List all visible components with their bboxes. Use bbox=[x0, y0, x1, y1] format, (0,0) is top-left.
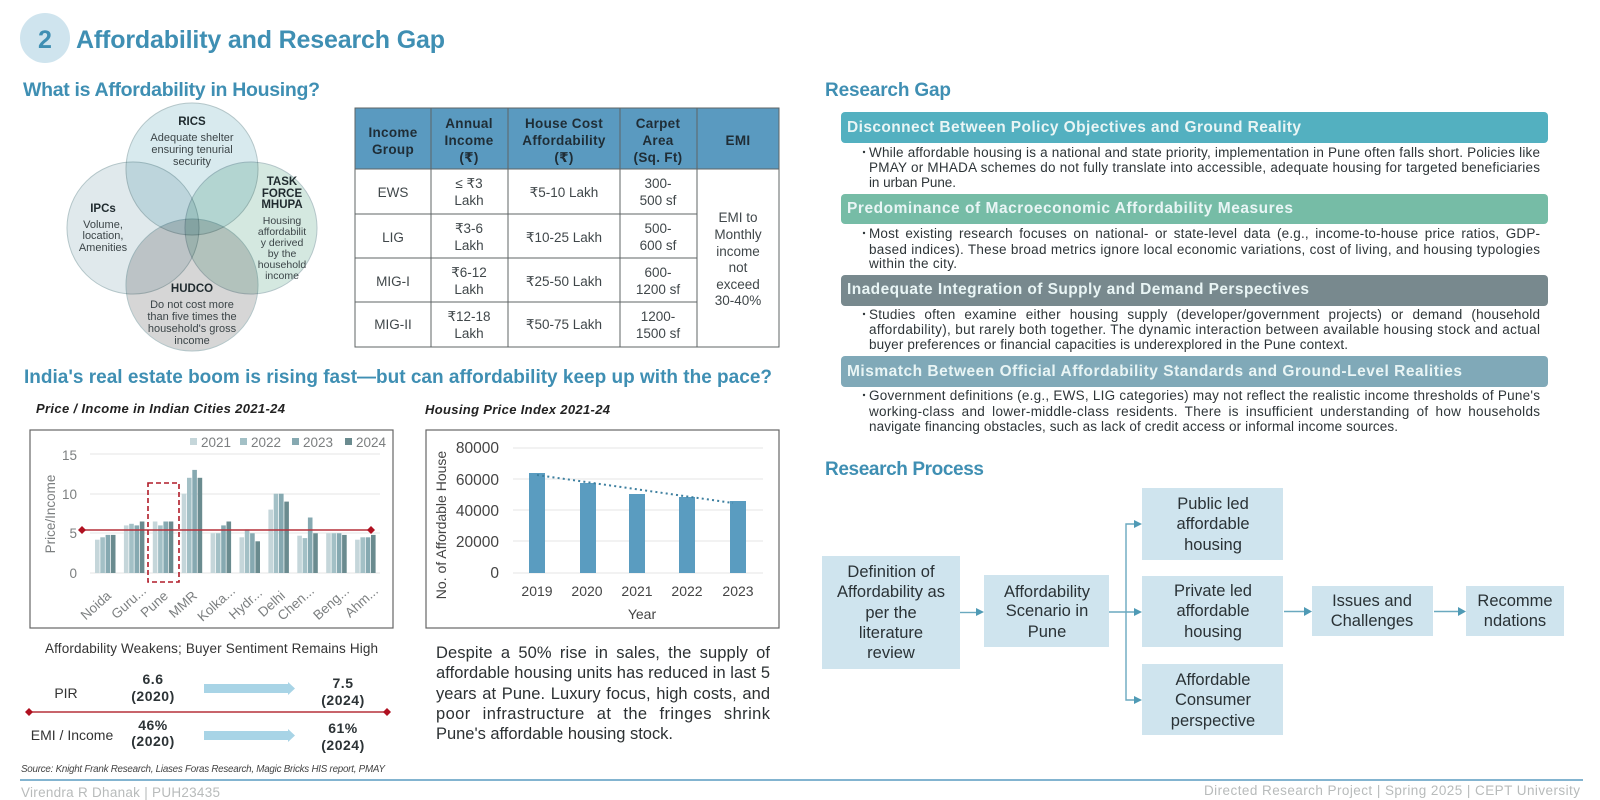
paragraph: supply reduced: years at Pune. Luxury focus, high costs, and bbox=[436, 685, 770, 703]
item: macroeconomic measures: Most existing research focuses on national- or state-level data (e.g., income-to-house price ratios, GDP- bbox=[869, 226, 1540, 241]
venn diagram: affordability definitions: than five times the bbox=[147, 311, 237, 323]
table: income groups: LIG bbox=[382, 230, 404, 245]
axis labels bbox=[433, 440, 754, 622]
step: recommendations: ndations bbox=[1484, 612, 1546, 630]
heading: what is affordability: What is Affordability in Housing? bbox=[23, 79, 320, 101]
footer: Virendra R Dhanak | PUH23435 bbox=[21, 785, 220, 800]
table: income groups: Income bbox=[368, 125, 418, 140]
category labels: Guru... bbox=[108, 583, 149, 622]
table: income groups: ₹25-50 Lakh bbox=[526, 274, 602, 289]
table: income groups: not bbox=[729, 260, 748, 275]
bar chart: affordable house supply bbox=[426, 430, 779, 628]
venn diagram: affordability definitions: ensuring tenurial bbox=[151, 144, 233, 156]
table: income groups: ₹5-10 Lakh bbox=[530, 185, 598, 200]
title: Affordability and Research Gap bbox=[76, 26, 445, 54]
chart title: housing index: Housing Price Index 2021-24 bbox=[425, 402, 611, 417]
item: policy disconnect: PMAY or MHADA schemes do not fully translate into accessible, adequate housing for targeted beneficiaries bbox=[869, 160, 1540, 175]
footer: Directed Research Project | Spring 2025 | CEPT University bbox=[1204, 783, 1580, 798]
step: definition: Definition of bbox=[847, 563, 935, 581]
category labels: Pune bbox=[138, 588, 171, 620]
item: macroeconomic measures bbox=[841, 194, 1548, 271]
paragraph: supply reduced bbox=[436, 644, 771, 743]
table: income groups: (₹) bbox=[554, 150, 574, 165]
threshold line bbox=[78, 526, 375, 534]
axis labels: No. of Affordable House bbox=[433, 451, 449, 599]
arrows: branching bbox=[1109, 520, 1142, 704]
table: income groups: EMI to bbox=[718, 210, 758, 225]
venn diagram: affordability definitions: income bbox=[265, 270, 299, 282]
table: income groups: ≤ ₹3 bbox=[455, 176, 483, 191]
step: scenario: Pune bbox=[1028, 623, 1066, 641]
axis labels: 20000 bbox=[456, 534, 499, 551]
step: consumer bbox=[1142, 664, 1283, 735]
step: private led: Private led bbox=[1174, 582, 1252, 600]
title: 2 bbox=[38, 26, 52, 54]
venn diagram: affordability definitions: Do not cost more bbox=[150, 299, 234, 311]
step: definition: review bbox=[867, 644, 915, 662]
table: income groups: 600 sf bbox=[640, 238, 677, 253]
venn diagram: affordability definitions: security bbox=[173, 156, 211, 168]
step: scenario: Affordability bbox=[1004, 583, 1091, 601]
paragraph: supply reduced: Pune's affordable housing stock. bbox=[436, 725, 673, 743]
axis labels: Year bbox=[628, 606, 656, 622]
table: income groups: Lakh bbox=[454, 193, 484, 208]
table: income groups: ₹6-12 bbox=[451, 265, 487, 280]
highlight: Pune bbox=[148, 483, 179, 582]
step: public led: Public led bbox=[1177, 495, 1249, 513]
legend: 2022 bbox=[251, 435, 281, 450]
trend line bbox=[537, 475, 733, 503]
table: income groups: (Sq. Ft) bbox=[634, 150, 682, 165]
step: private led bbox=[1142, 576, 1283, 647]
step: recommendations: Recomme bbox=[1477, 592, 1553, 610]
venn diagram: affordability definitions: household's gross bbox=[148, 323, 237, 335]
step: definition: per the bbox=[865, 604, 917, 622]
table: income groups: (₹) bbox=[459, 150, 479, 165]
category labels bbox=[78, 583, 381, 624]
venn diagram: affordability definitions: IPCs bbox=[90, 203, 116, 215]
item: official standards mismatch bbox=[841, 356, 1548, 434]
table: income groups: Income bbox=[444, 133, 494, 148]
table: income groups: Annual bbox=[445, 116, 493, 131]
panel: research gap list bbox=[841, 112, 1548, 434]
paragraph: supply reduced: Despite a 50% rise in sales, the supply of bbox=[436, 644, 770, 662]
table: income groups: ₹12-18 bbox=[447, 309, 491, 324]
axis labels: 80000 bbox=[456, 440, 499, 457]
step: scenario: Scenario in bbox=[1006, 602, 1088, 620]
table: income groups: ₹3-6 bbox=[455, 221, 483, 236]
legend: 2023 bbox=[303, 435, 333, 450]
sub-heading: affordability weakens: Affordability Weakens; Buyer Sentiment Remains High bbox=[45, 641, 378, 656]
table: income groups: Carpet bbox=[636, 116, 680, 131]
heading: research process: Research Process bbox=[825, 459, 984, 480]
item: supply and demand: affordability), but rarely both together. The dynamic interaction between available housing stock and actual bbox=[869, 322, 1540, 337]
item: official standards mismatch: Mismatch Between Official Affordability Standards and Ground-Level Realities bbox=[847, 363, 1462, 380]
venn diagram: affordability definitions: affordabilit bbox=[258, 226, 306, 238]
table: income groups: 300- bbox=[644, 176, 672, 191]
table: income groups: Lakh bbox=[454, 238, 484, 253]
category labels: Noida bbox=[78, 588, 114, 623]
category labels: Ahm... bbox=[342, 583, 381, 620]
table: income groups: 1500 sf bbox=[636, 326, 680, 341]
step: private led: affordable bbox=[1176, 602, 1250, 620]
chart title: price to income: Price / Income in Indian Cities 2021-24 bbox=[36, 401, 286, 416]
item: supply and demand: Studies often examine either housing supply (developer/government projects) or demand (household bbox=[869, 307, 1540, 322]
bar chart: price to income by city bbox=[30, 430, 393, 628]
source note: Source: Knight Frank Research, Liases Foras Research, Magic Bricks HIS report, PMAY bbox=[21, 764, 386, 775]
table: income groups: Lakh bbox=[454, 326, 484, 341]
table: income groups: EWS bbox=[378, 185, 408, 200]
venn diagram: affordability definitions: FORCE bbox=[262, 188, 302, 200]
y axis labels: 0 bbox=[69, 566, 77, 581]
paragraph: supply reduced: affordable housing units has reduced in last 5 bbox=[436, 664, 770, 682]
venn diagram: affordability definitions: by the bbox=[268, 248, 296, 260]
comparison: PIR and EMI: EMI / Income bbox=[31, 727, 113, 743]
comparison: PIR and EMI: (2024) bbox=[321, 692, 365, 708]
step: issues: Challenges bbox=[1331, 612, 1413, 630]
axis labels: 0 bbox=[490, 565, 499, 582]
item: macroeconomic measures: based indices). These broad metrics ignore local economic variations, cost of living, and housing typologies bbox=[869, 242, 1540, 257]
item: official standards mismatch: Government definitions (e.g., EWS, LIG categories) may not reflect the realistic income thresholds of Pune's bbox=[869, 388, 1540, 403]
step: scenario bbox=[984, 575, 1109, 647]
bars bbox=[95, 470, 376, 573]
table: income groups: MIG-I bbox=[376, 274, 410, 289]
item: policy disconnect: While affordable housing is a national and state priority, implementation in Pune often falls short. Policies like bbox=[869, 145, 1540, 160]
category labels: Kolka... bbox=[195, 583, 238, 624]
axis labels: 2023 bbox=[722, 583, 754, 599]
table: income groups: House Cost bbox=[525, 116, 603, 131]
step: public led: housing bbox=[1184, 536, 1242, 554]
arrow bbox=[960, 608, 984, 616]
table: income groups: Lakh bbox=[454, 282, 484, 297]
footer bbox=[20, 780, 1583, 800]
comparison: PIR and EMI: 61% bbox=[328, 720, 358, 736]
step: definition bbox=[822, 556, 960, 669]
category labels: Delhi bbox=[255, 588, 288, 620]
table: income groups: 1200- bbox=[641, 309, 675, 324]
step: consumer: Consumer bbox=[1175, 691, 1252, 709]
comparison: PIR and EMI: 6.6 bbox=[143, 671, 163, 687]
item: official standards mismatch: working-class and lower-middle-class residents. There is insufficient understanding of how households bbox=[868, 404, 1540, 419]
step: public led: affordable bbox=[1176, 515, 1250, 533]
table: income groups: Area bbox=[642, 133, 674, 148]
table: income groups: ₹50-75 Lakh bbox=[526, 317, 602, 332]
item: macroeconomic measures: Predominance of Macroeconomic Affordability Measures bbox=[847, 200, 1293, 217]
step: recommendations bbox=[1466, 586, 1564, 636]
comparison: PIR and EMI: (2024) bbox=[321, 737, 365, 753]
venn diagram: affordability definitions bbox=[67, 103, 317, 351]
legend: 2021 bbox=[201, 435, 231, 450]
venn diagram: affordability definitions: Volume, bbox=[83, 219, 123, 231]
table: income groups: income bbox=[716, 244, 760, 259]
venn diagram: affordability definitions: y derived bbox=[261, 237, 303, 249]
item: supply and demand bbox=[841, 275, 1548, 352]
item: official standards mismatch: navigate financing obstacles, such as lack of credit access or informal income sources. bbox=[869, 419, 1398, 434]
venn diagram: affordability definitions: location, bbox=[83, 230, 123, 242]
legend: 2024 bbox=[356, 435, 387, 450]
item: policy disconnect: Disconnect Between Policy Objectives and Ground Reality bbox=[847, 119, 1301, 136]
venn diagram: affordability definitions: household bbox=[258, 259, 306, 271]
arrow bbox=[1434, 607, 1466, 616]
venn diagram: affordability definitions: MHUPA bbox=[261, 199, 303, 211]
axis labels: 2022 bbox=[671, 583, 703, 599]
table: income groups: 600- bbox=[644, 265, 672, 280]
venn diagram: affordability definitions: RICS bbox=[178, 116, 206, 128]
arrow bbox=[1284, 607, 1312, 616]
item: policy disconnect: in urban Pune. bbox=[869, 175, 956, 190]
step: private led: housing bbox=[1184, 623, 1242, 641]
venn diagram: affordability definitions: income bbox=[174, 335, 210, 347]
item: policy disconnect bbox=[841, 112, 1548, 190]
comparison: PIR and EMI: 7.5 bbox=[333, 675, 353, 691]
item: supply and demand: Inadequate Integration of Supply and Demand Perspectives bbox=[847, 281, 1309, 298]
step: issues: Issues and bbox=[1332, 592, 1412, 610]
category labels: MMR bbox=[166, 588, 200, 621]
heading: real estate boom: India's real estate boom is rising fast—but can affordability keep up with the pace? bbox=[24, 367, 772, 388]
table: income groups: Affordability bbox=[522, 133, 606, 148]
item: macroeconomic measures: within the city. bbox=[868, 256, 957, 271]
step: consumer: perspective bbox=[1171, 712, 1255, 730]
item: supply and demand: buyer preferences or financial capacities is underexplored in the Pune context. bbox=[869, 337, 1348, 352]
comparison: PIR and EMI: PIR bbox=[54, 685, 78, 701]
y axis labels: 15 bbox=[62, 448, 77, 463]
comparison: PIR and EMI: (2020) bbox=[131, 733, 175, 749]
venn diagram: affordability definitions: Housing bbox=[263, 215, 301, 227]
y axis labels bbox=[43, 448, 77, 581]
venn diagram: affordability definitions: HUDCO bbox=[171, 283, 213, 295]
axis labels: 2020 bbox=[571, 583, 603, 599]
venn diagram: affordability definitions: TASK bbox=[267, 176, 298, 188]
venn diagram: affordability definitions: Adequate shelter bbox=[150, 132, 234, 144]
table: income groups: Group bbox=[372, 142, 414, 157]
table: income groups: 500- bbox=[644, 221, 672, 236]
y axis labels: Price/Income bbox=[43, 475, 58, 553]
step: public led bbox=[1142, 488, 1283, 560]
table: income groups: 1200 sf bbox=[636, 282, 680, 297]
comparison: PIR and EMI bbox=[25, 671, 391, 753]
title bbox=[20, 13, 445, 63]
y axis labels: 10 bbox=[62, 487, 77, 502]
table: income groups: exceed bbox=[716, 277, 760, 292]
paragraph: supply reduced: poor infrastructure at the fringes shrink bbox=[436, 705, 771, 723]
step: issues bbox=[1312, 586, 1433, 636]
venn diagram: affordability definitions: Amenities bbox=[79, 242, 128, 254]
axis labels: 60000 bbox=[456, 472, 499, 489]
table: income groups: MIG-II bbox=[374, 317, 412, 332]
category labels: Hydr... bbox=[226, 585, 265, 622]
category labels: Beng... bbox=[310, 583, 352, 623]
heading: research gap: Research Gap bbox=[825, 80, 951, 101]
table: income groups: ₹10-25 Lakh bbox=[526, 230, 602, 245]
y axis labels: 5 bbox=[69, 526, 77, 541]
axis labels: 2021 bbox=[621, 583, 653, 599]
legend bbox=[190, 435, 387, 450]
axis labels: 2019 bbox=[521, 583, 553, 599]
comparison: PIR and EMI: 46% bbox=[138, 717, 168, 733]
table: income groups: Monthly bbox=[714, 227, 762, 242]
flowchart: research process bbox=[822, 488, 1564, 735]
table: income groups: EMI bbox=[726, 133, 750, 148]
axis labels: 40000 bbox=[456, 503, 499, 520]
category labels: Chen... bbox=[275, 583, 317, 623]
comparison: PIR and EMI: (2020) bbox=[131, 688, 175, 704]
table: income groups: 500 sf bbox=[640, 193, 677, 208]
table: income groups bbox=[355, 108, 779, 347]
step: definition: Affordability as bbox=[837, 583, 945, 601]
step: consumer: Affordable bbox=[1176, 671, 1250, 689]
table: income groups: 30-40% bbox=[715, 293, 761, 308]
step: definition: literature bbox=[859, 624, 923, 642]
